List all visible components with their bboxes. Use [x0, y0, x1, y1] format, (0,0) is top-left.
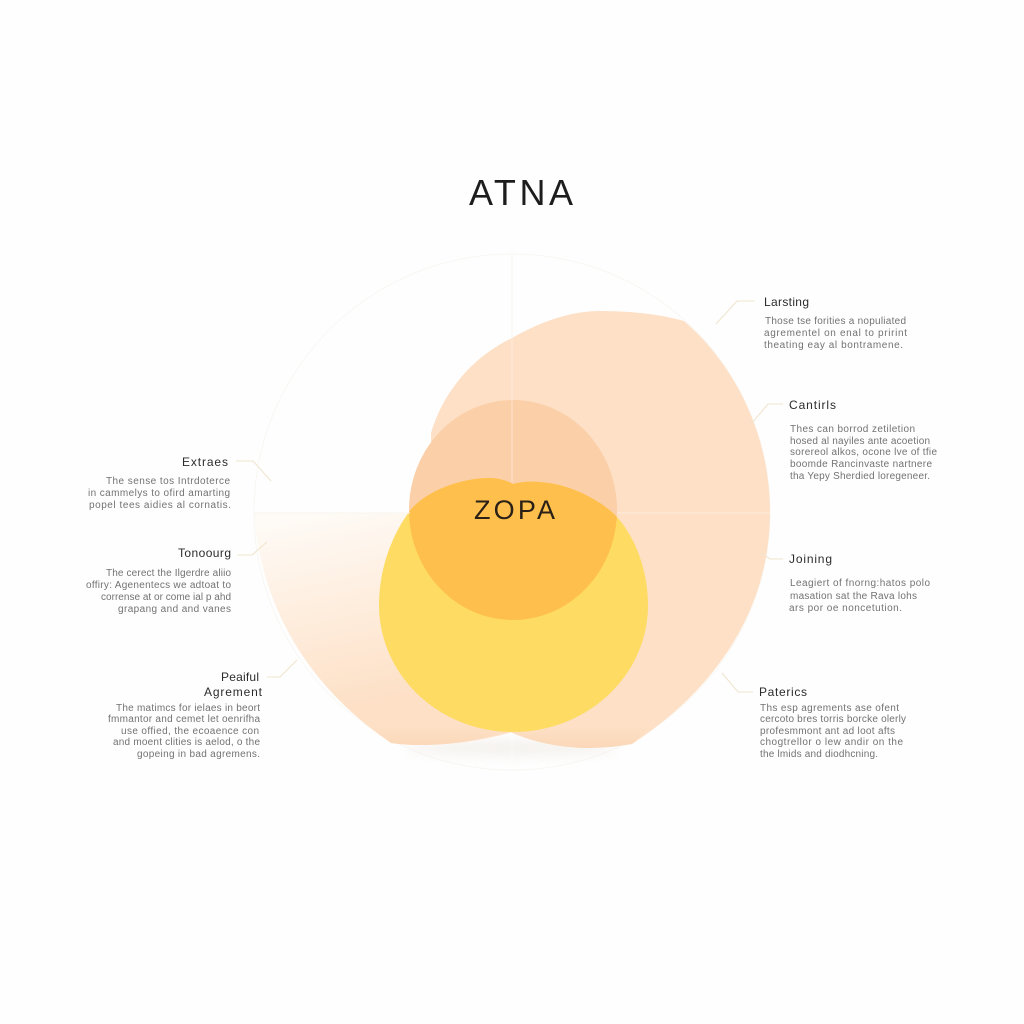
left peach shape — [254, 513, 512, 745]
callout: Extraes: popel tees aidies al cornatis. — [89, 500, 231, 511]
callout: Paterics: cercoto bres torris borcke olerly — [760, 714, 906, 725]
callout: Paterics: the lmids and diodhcning. — [760, 749, 878, 760]
callout: Paterics: Ths esp agrements ase ofent — [760, 703, 899, 714]
lower shading — [365, 722, 655, 748]
yellow circle — [379, 478, 648, 732]
callout: Joining: Joining — [789, 552, 832, 566]
callout: Cantirls: tha Yepy Sherdied loregeneer. — [790, 471, 930, 482]
callout: Peaiful Agrement: gopeing in bad agremens. — [137, 749, 260, 760]
callout: Lasting: Those tse forities a nopuliated — [765, 316, 906, 327]
callout: Extraes: The sense tos Intrdoterce — [106, 476, 230, 487]
callout: Peaiful Agrement: The matimcs for ielaes in beort — [116, 703, 260, 714]
outer guide circle — [254, 254, 770, 770]
callout: Peaiful Agrement: and moent clities is aelod, o the — [113, 737, 260, 748]
callout: Joining — [761, 552, 930, 614]
callout: Peaiful Agrement: Agrement — [204, 685, 263, 699]
callout: Cantirls: sorereol alkos, ocone lve of tfie — [790, 447, 937, 458]
venn diagram — [254, 254, 770, 770]
callout: Peaiful Agrement: fmmantor and cemet let oenrifha — [108, 714, 260, 725]
guide lines — [512, 338, 770, 766]
callout: Lasting — [716, 295, 907, 351]
callout: Cantirls: boomde Rancinvaste nartnere — [790, 459, 932, 470]
ZOPA label: ZOPA — [474, 495, 555, 525]
callout: Tonoourg: offiry: Agenentecs we adtoat to — [86, 580, 231, 591]
callout: Paterics: profesmmont ant ad loot afts — [760, 726, 895, 737]
callout: Lasting: theating eay al bontramene. — [764, 340, 903, 351]
middle circle — [409, 400, 617, 620]
callout: Joining: masation sat the Rava lohs — [790, 591, 917, 602]
callout: Tonoourg: The cerect the Ilgerdre aliio — [106, 568, 231, 579]
callout: Cantirls: Thes can borrod zetiletion — [790, 424, 915, 435]
callout: Joining: Leagiert of fnorng:hatos polo — [790, 578, 930, 589]
callout: Tonoourg: Tonoourg — [178, 546, 231, 560]
callout: Cantirls — [752, 398, 937, 482]
callout: Extraes — [88, 455, 271, 511]
callout: Peaiful Agrement: use offied, the ecoaence con — [121, 726, 259, 737]
callout: Tonoourg: corrense at or come ial p ahd — [101, 592, 231, 603]
callout: Joining: ars por oe noncetution. — [789, 603, 902, 614]
callout: Lasting: agrementel on enal to prirint — [764, 328, 907, 339]
callout: Peaiful Agrement — [108, 660, 297, 760]
callout: Cantirls: hosed al nayiles ante acoetion — [790, 436, 930, 447]
callout: Extraes: in cammelys to ofird amarting — [88, 488, 230, 499]
callout: Tonoourg: grapang and and vanes — [118, 604, 231, 615]
callout: Extraes: Extraes — [182, 455, 228, 469]
right peach shape — [431, 311, 770, 748]
callout: Tonoourg — [86, 542, 267, 615]
callout: Paterics — [722, 673, 906, 760]
soft ground shadow — [407, 740, 617, 756]
callout: Peaiful Agrement: Peaiful — [221, 670, 259, 684]
callout: Lasting: Larsting — [764, 295, 809, 309]
overlap zone — [409, 478, 617, 620]
callout: Paterics: chogtrellor o lew andir on the — [760, 737, 903, 748]
callout: Paterics: Paterics — [759, 685, 807, 699]
title: ATNA — [469, 172, 573, 213]
callout: Cantirls: Cantirls — [789, 398, 836, 412]
